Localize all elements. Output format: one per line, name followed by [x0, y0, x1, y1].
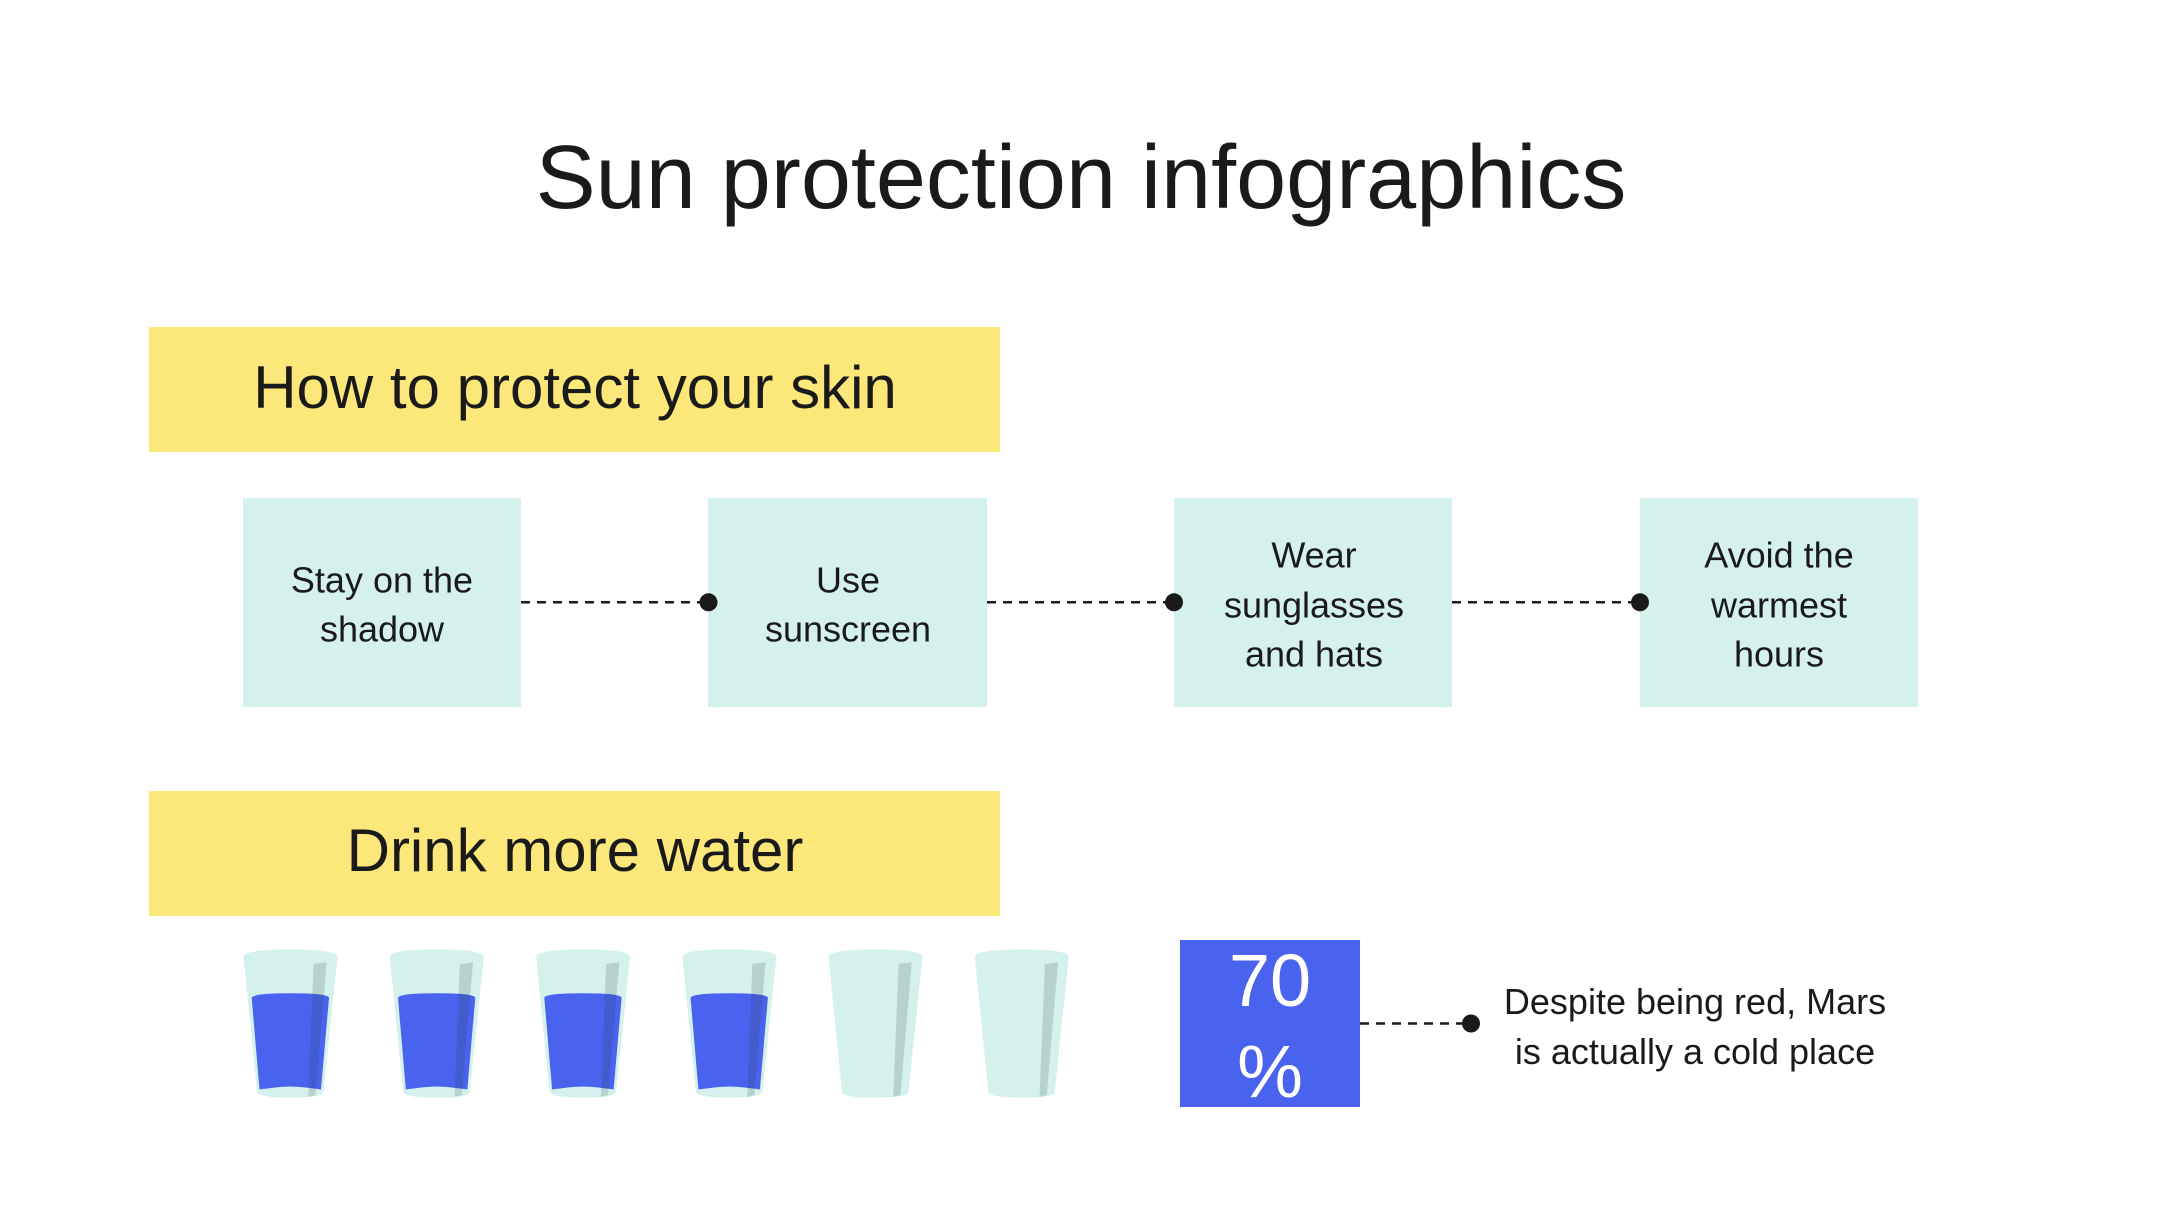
step: use sunscreen: Use [816, 560, 880, 600]
arrow: step 1 to step 2 [521, 593, 718, 611]
step: wear sunglasses and hats [1174, 498, 1452, 707]
icon: empty glass 6 [975, 949, 1069, 1098]
callout: 70 percent [1180, 939, 1360, 1113]
step: stay on the shadow [243, 498, 521, 707]
title: Sun protection infographics [536, 128, 1626, 228]
icon: empty glass 5 [828, 949, 922, 1098]
chart: water glasses pictogram [244, 949, 1069, 1098]
step: avoid the warmest hours: hours [1734, 634, 1824, 674]
icon: full glass 1 [244, 949, 338, 1098]
step: use sunscreen: sunscreen [765, 608, 931, 650]
step: avoid the warmest hours: warmest [1710, 584, 1847, 626]
text block: mars note: is actually a cold place [1515, 1031, 1875, 1072]
callout: 70 percent: 70 [1229, 939, 1311, 1022]
step: avoid the warmest hours [1640, 498, 1918, 707]
arrow: step 2 to step 3 [987, 593, 1183, 611]
panel: how to protect your skin heading [149, 327, 1000, 452]
panel: drink more water heading: Drink more water [347, 817, 803, 884]
text block: mars note [1504, 981, 1886, 1072]
arrow: percent to note [1360, 1014, 1480, 1032]
step: stay on the shadow: shadow [320, 608, 445, 650]
text block: mars note: Despite being red, Mars [1504, 981, 1886, 1022]
callout: 70 percent: % [1237, 1030, 1303, 1113]
step: use sunscreen [708, 498, 987, 707]
arrow: step 3 to step 4 [1452, 593, 1649, 611]
panel: how to protect your skin heading: How to protect your skin [253, 354, 897, 421]
step: avoid the warmest hours: Avoid the [1704, 534, 1854, 576]
panel: drink more water heading [149, 791, 1000, 916]
step: stay on the shadow: Stay on the [291, 560, 473, 600]
icon: full glass 3 [536, 949, 630, 1098]
step: wear sunglasses and hats: and hats [1245, 634, 1383, 674]
step: wear sunglasses and hats: sunglasses [1224, 584, 1404, 626]
step: wear sunglasses and hats: Wear [1271, 534, 1357, 576]
icon: full glass 4 [682, 949, 776, 1098]
icon: full glass 2 [390, 949, 484, 1098]
panel: protection steps flow [243, 498, 1918, 707]
